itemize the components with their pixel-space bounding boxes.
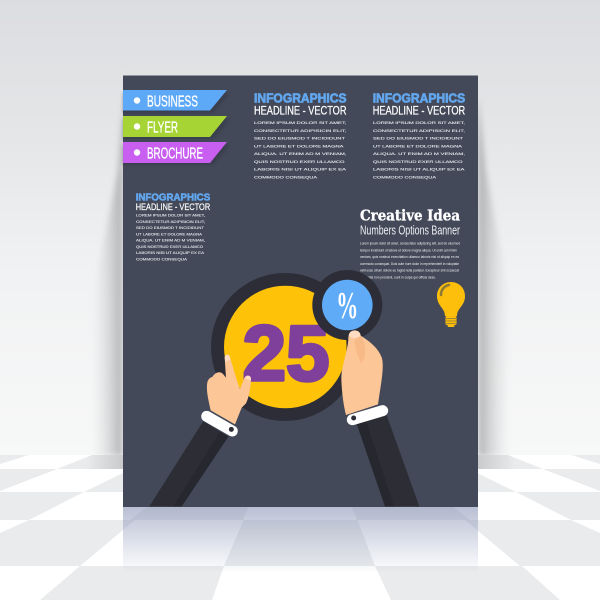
text block: left: UT LABORE ET DOLORE MAGNA bbox=[136, 232, 203, 236]
reflection of flyer on floor bbox=[123, 507, 478, 573]
text block: top right: INFOGRAPHICS bbox=[373, 92, 465, 106]
text block: top middle: SED DO EIUSMOD T INCIDIDUNT bbox=[254, 136, 346, 140]
text block: left: INFOGRAPHICS bbox=[136, 192, 210, 204]
checkered floor bbox=[0, 455, 600, 600]
creative idea text block: cupidatat non proident, sunt in culpa qui officia dese. bbox=[360, 275, 436, 279]
text block: top middle: HEADLINE - VECTOR bbox=[254, 106, 346, 118]
ribbon: flyer bbox=[123, 116, 230, 139]
text block: top right: COMMODO CONSEQUA bbox=[373, 174, 436, 180]
text block: top right: SED DO EIUSMOD T INCIDIDUNT bbox=[373, 136, 464, 140]
text block: top middle: INFOGRAPHICS bbox=[254, 92, 346, 106]
ribbon: brochure bbox=[123, 142, 230, 165]
right arm and hand bbox=[341, 330, 419, 506]
text block: left: QUIS NOSTRUD EXER ULLAMCO bbox=[136, 245, 203, 249]
text block: top right: CONSECTETUR ADIPISICIN ELIT, bbox=[373, 128, 465, 133]
creative idea text block: Creative Idea bbox=[360, 208, 461, 225]
flyer panel bbox=[123, 76, 478, 507]
text block: left: SED DO EIUSMOD T INCIDIDUNT bbox=[136, 226, 205, 230]
text block: top right: LABORIS NISI UT ALIQUIP EX EA bbox=[373, 167, 465, 172]
ribbon: flyer: FLYER bbox=[147, 120, 178, 136]
text block: top middle: LABORIS NISI UT ALIQUIP EX EA bbox=[254, 167, 346, 172]
text block: left: ALIQUA. UT ENIM AD M VENIAM, bbox=[136, 238, 205, 242]
number 25: 25 bbox=[243, 309, 329, 397]
left arm and hand bbox=[149, 355, 251, 506]
text block: top middle: CONSECTETUR ADIPISICIN ELIT, bbox=[254, 128, 346, 133]
text block: left bbox=[136, 192, 210, 261]
text block: top right bbox=[373, 92, 465, 180]
creative idea text block: tempor incididunt ut labore et dolore magna aliqua. Ut enim ad minim bbox=[360, 248, 457, 252]
text block: top right: HEADLINE - VECTOR bbox=[373, 106, 465, 118]
text block: top middle: ALIQUA. UT ENIM AD M VENIAM, bbox=[254, 151, 346, 156]
text block: left: HEADLINE - VECTOR bbox=[136, 202, 210, 213]
ribbon: brochure: BROCHURE bbox=[147, 146, 203, 162]
text block: top middle: COMMODO CONSEQUA bbox=[254, 174, 317, 180]
creative idea text block: velit esse cillum dolore eu fugiat nulla pariatur. Excepteur sint occaecat bbox=[360, 268, 459, 272]
creative idea text block bbox=[360, 208, 461, 279]
text block: left: CONSECTETUR ADIPISICIN ELIT, bbox=[136, 220, 205, 224]
hands with sleeves bbox=[149, 330, 419, 506]
text block: top middle: UT LABORE ET DOLORE MAGNA bbox=[254, 143, 344, 148]
text block: top middle: QUIS NOSTRUD EXER ULLAMCO bbox=[254, 159, 344, 164]
creative idea text block: veniam, quis nostrud exercitation ullamco laboris nisi ut aliquip ex ea bbox=[360, 255, 460, 259]
creative idea text block: Lorem ipsum dolor sit amet, consectetur adipiscing elit, sed do eiusmod bbox=[360, 242, 460, 246]
text block: top right: QUIS NOSTRUD EXER ULLAMCO bbox=[373, 159, 462, 164]
text block: left: LABORIS NISI UT ALIQUIP EX EA bbox=[136, 251, 205, 255]
text block: top right: LOREM IPSUM DOLOR SIT AMET, bbox=[373, 120, 465, 125]
creative idea text block: commodo consequat. Duis aute irure dolor in reprehenderit in voluptate bbox=[360, 262, 459, 266]
ribbon: business bbox=[123, 90, 230, 113]
creative idea text block: Numbers Options Banner bbox=[360, 222, 460, 238]
ribbon: business: BUSINESS bbox=[147, 94, 198, 110]
text block: left: COMMODO CONSEQUA bbox=[136, 257, 188, 261]
text block: left: LOREM IPSUM DOLOR SIT AMET, bbox=[136, 214, 205, 218]
wall background bbox=[0, 0, 600, 456]
icon: light bulb bbox=[437, 282, 465, 327]
text block: top right: ALIQUA. UT ENIM AD M VENIAM, bbox=[373, 151, 465, 156]
percent sign: % bbox=[336, 285, 358, 327]
text block: top middle: LOREM IPSUM DOLOR SIT AMET, bbox=[254, 120, 346, 125]
percent badge bbox=[312, 270, 382, 340]
panel shadow on wall bbox=[92, 95, 510, 456]
text block: top middle bbox=[254, 92, 346, 180]
text block: top right: UT LABORE ET DOLORE MAGNA bbox=[373, 143, 462, 148]
big yellow circle with number bbox=[211, 273, 359, 421]
